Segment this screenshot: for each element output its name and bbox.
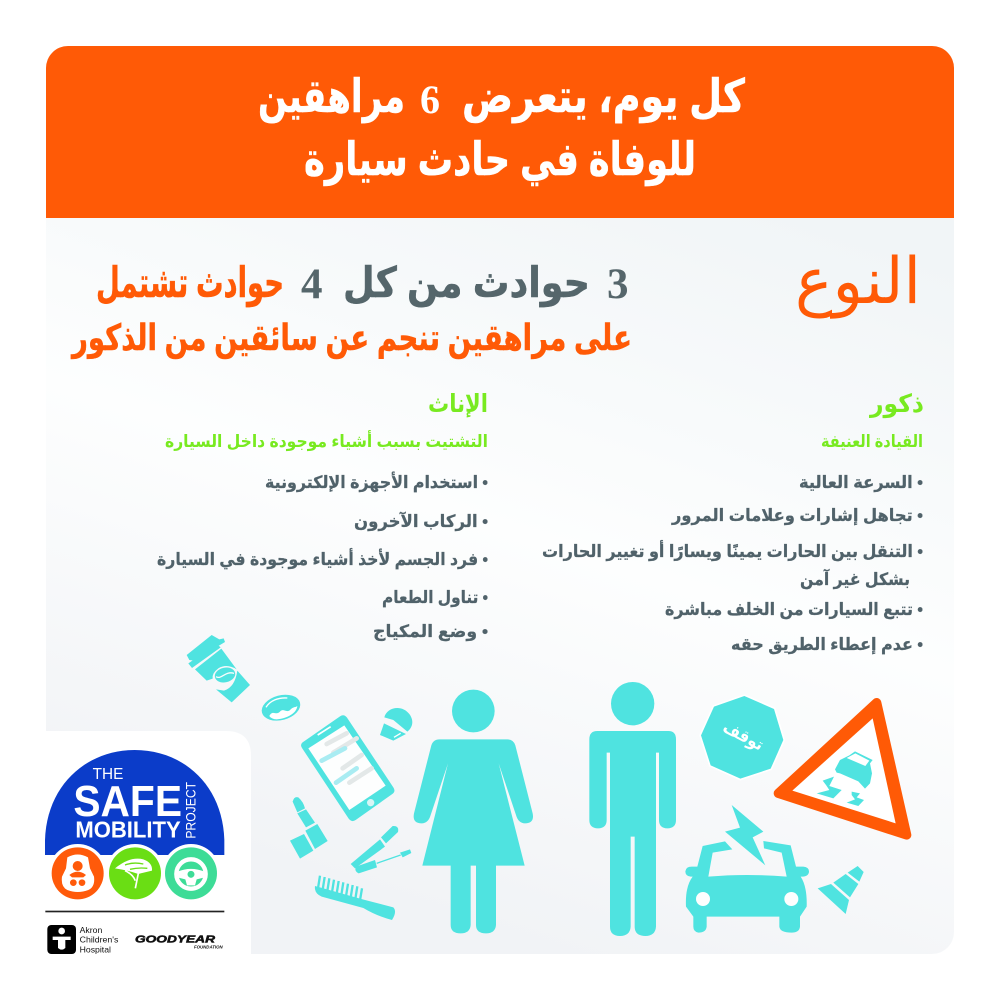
- males list item 1: • السرعة العالية: [799, 473, 923, 493]
- icon: stop sign: [701, 696, 783, 779]
- logo: goodyear foundation: GOODYEAR: [135, 934, 216, 945]
- icon: donut: [259, 691, 303, 725]
- icon: muffin: [380, 708, 412, 741]
- icon: steering wheel: [162, 844, 220, 903]
- males subheading: القيادة العنيفة: [821, 432, 923, 451]
- icon: warning triangle: [778, 703, 907, 835]
- text block: males: [542, 390, 924, 655]
- females list item 5: • وضع المكياج: [373, 622, 488, 642]
- title line 1: مراهقين: [258, 70, 405, 123]
- icon: stop sign: توقف: [719, 717, 767, 755]
- icons: lipstick, mascara and comb: [290, 797, 411, 920]
- icons: cup and donut: [187, 635, 303, 725]
- statistic line 1: 3: [607, 261, 628, 308]
- title line 2: للوفاة في حادث سيارة: [304, 133, 696, 186]
- title line 1: كل يوم، يتعرض: [462, 70, 745, 123]
- icon: coffee cup: [187, 635, 250, 702]
- icon: bicycle helmet: [106, 844, 164, 903]
- logo: safe mobility project: [45, 750, 224, 954]
- icon: comb: [315, 876, 395, 920]
- logo dome: [45, 750, 224, 855]
- heading: gender: النوع: [795, 245, 921, 319]
- females heading: الإناث: [428, 390, 488, 418]
- logo wordmark: PROJECT: [183, 782, 199, 839]
- statistic headline: [70, 259, 632, 359]
- statistic line 1: [96, 259, 628, 308]
- females list item 4: • تناول الطعام: [382, 588, 488, 608]
- icon: woman figure: [414, 690, 533, 933]
- icon: smartphone: [301, 715, 394, 821]
- title line 1: 6: [420, 77, 440, 122]
- logo: akron children's hospital: Children's: [80, 935, 119, 945]
- icon: mascara and wand: [351, 826, 411, 873]
- icon: car seat: [48, 844, 107, 903]
- females list item 1: • استخدام الأجهزة الإلكترونية: [265, 472, 488, 493]
- icon: man figure: [589, 682, 676, 936]
- females list item 2: • الركاب الآخرون: [354, 511, 488, 532]
- statistic line 1: حوادث من كل: [343, 259, 590, 308]
- icons: risky driving and man: [589, 682, 907, 936]
- logo wordmark: THE: [93, 766, 123, 783]
- divider rule: [45, 911, 224, 912]
- logo: akron children's hospital: [47, 925, 119, 954]
- males list item 2: • تجاهل إشارات وعلامات المرور: [671, 506, 923, 526]
- logo: akron children's hospital: Hospital: [80, 944, 111, 954]
- logo: akron children's hospital: Akron: [80, 925, 102, 935]
- icons: phone, muffin and woman: [301, 690, 533, 933]
- panel: logo cutout: [46, 731, 251, 954]
- males list item 4: • تتبع السيارات من الخلف مباشرة: [665, 600, 923, 620]
- panel: orange header: [46, 46, 954, 218]
- statistic line 1: 4: [301, 261, 322, 308]
- males list item 5: • عدم إعطاء الطريق حقه: [731, 635, 923, 655]
- females subheading: التشتيت بسبب أشياء موجودة داخل السيارة: [165, 430, 488, 452]
- statistic line 2: على مراهقين تنجم عن سائقين من الذكور: [70, 317, 632, 359]
- logo: goodyear foundation: FOUNDATION: [194, 944, 224, 949]
- icon: skidding car and skid marks: [817, 751, 873, 806]
- statistic line 1: حوادث تشتمل: [96, 259, 284, 308]
- logo wordmark: MOBILITY: [75, 817, 181, 843]
- logo wordmark: SAFE: [73, 778, 182, 826]
- females list item 3: • فرد الجسم لأخذ أشياء موجودة في السيارة: [157, 548, 488, 570]
- males list item 3 line 1: • التنقل بين الحارات يمينًا ويسارًا أو تغيير الحارات: [542, 540, 923, 562]
- logo: goodyear foundation: [135, 934, 224, 949]
- title line 1: [258, 70, 745, 123]
- males heading: ذكور: [868, 390, 924, 419]
- logo wordmark: [73, 766, 199, 843]
- text block: females: [157, 390, 488, 642]
- icon: traffic cone: [818, 866, 864, 914]
- icon: lipstick: [290, 797, 328, 859]
- males list item 3 line 2: بشكل غير آمن: [800, 568, 910, 590]
- icon: crashed car: [685, 805, 809, 933]
